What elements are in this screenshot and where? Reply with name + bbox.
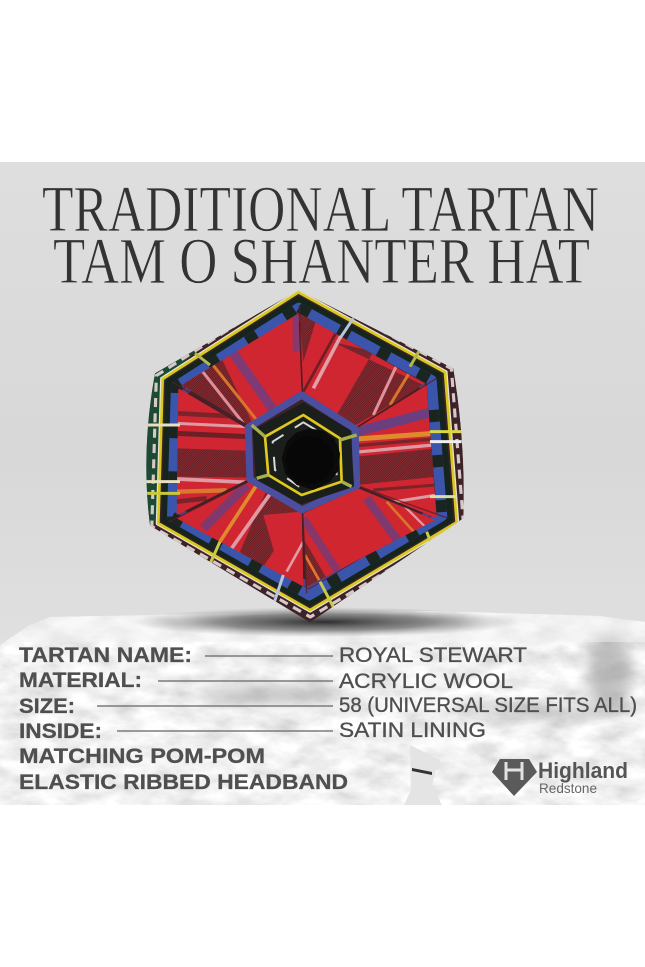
- hat base and outer rim: [140, 290, 464, 622]
- icon: diamond monogram: [492, 759, 537, 796]
- spec labels: INSIDE:: [19, 720, 102, 743]
- panel: left: [176, 388, 246, 515]
- tartan rings: [152, 285, 464, 617]
- spec labels: SIZE:: [19, 695, 75, 718]
- title: [42, 173, 599, 298]
- panel: lower left: [177, 482, 304, 586]
- panel: upper left: [182, 314, 302, 424]
- panel: lower right: [304, 488, 435, 586]
- panel seams: [168, 305, 448, 593]
- spec values: 58 (UNIVERSAL SIZE FITS ALL): [339, 694, 637, 717]
- panel: right: [358, 385, 437, 518]
- connector lines: [97, 656, 333, 731]
- logo subtitle: Redstone: [539, 780, 597, 796]
- spec labels: TARTAN NAME:: [19, 644, 192, 667]
- spec labels: MATCHING POM-POM: [19, 745, 265, 768]
- logo: Highland Redstone: [492, 758, 628, 796]
- center band: [248, 395, 357, 510]
- spec values: SATIN LINING: [339, 719, 486, 742]
- hat shadow on rock: [130, 607, 520, 637]
- panel: upper right: [300, 314, 425, 426]
- spec values: [339, 644, 637, 742]
- spec values: ACRYLIC WOOL: [339, 670, 513, 693]
- pom-pom: [282, 428, 340, 490]
- cross stripes over the rim: [145, 318, 462, 613]
- rock pedestal: [0, 605, 645, 808]
- spec labels: MATERIAL:: [19, 669, 142, 692]
- spec values: ROYAL STEWART: [339, 644, 527, 667]
- specification list: [19, 644, 637, 794]
- logo wordmark: Highland: [538, 758, 628, 783]
- tartan hat: [140, 285, 464, 622]
- spec labels: ELASTIC RIBBED HEADBAND: [19, 771, 348, 794]
- background panel: [0, 162, 645, 805]
- spec labels: [19, 644, 348, 794]
